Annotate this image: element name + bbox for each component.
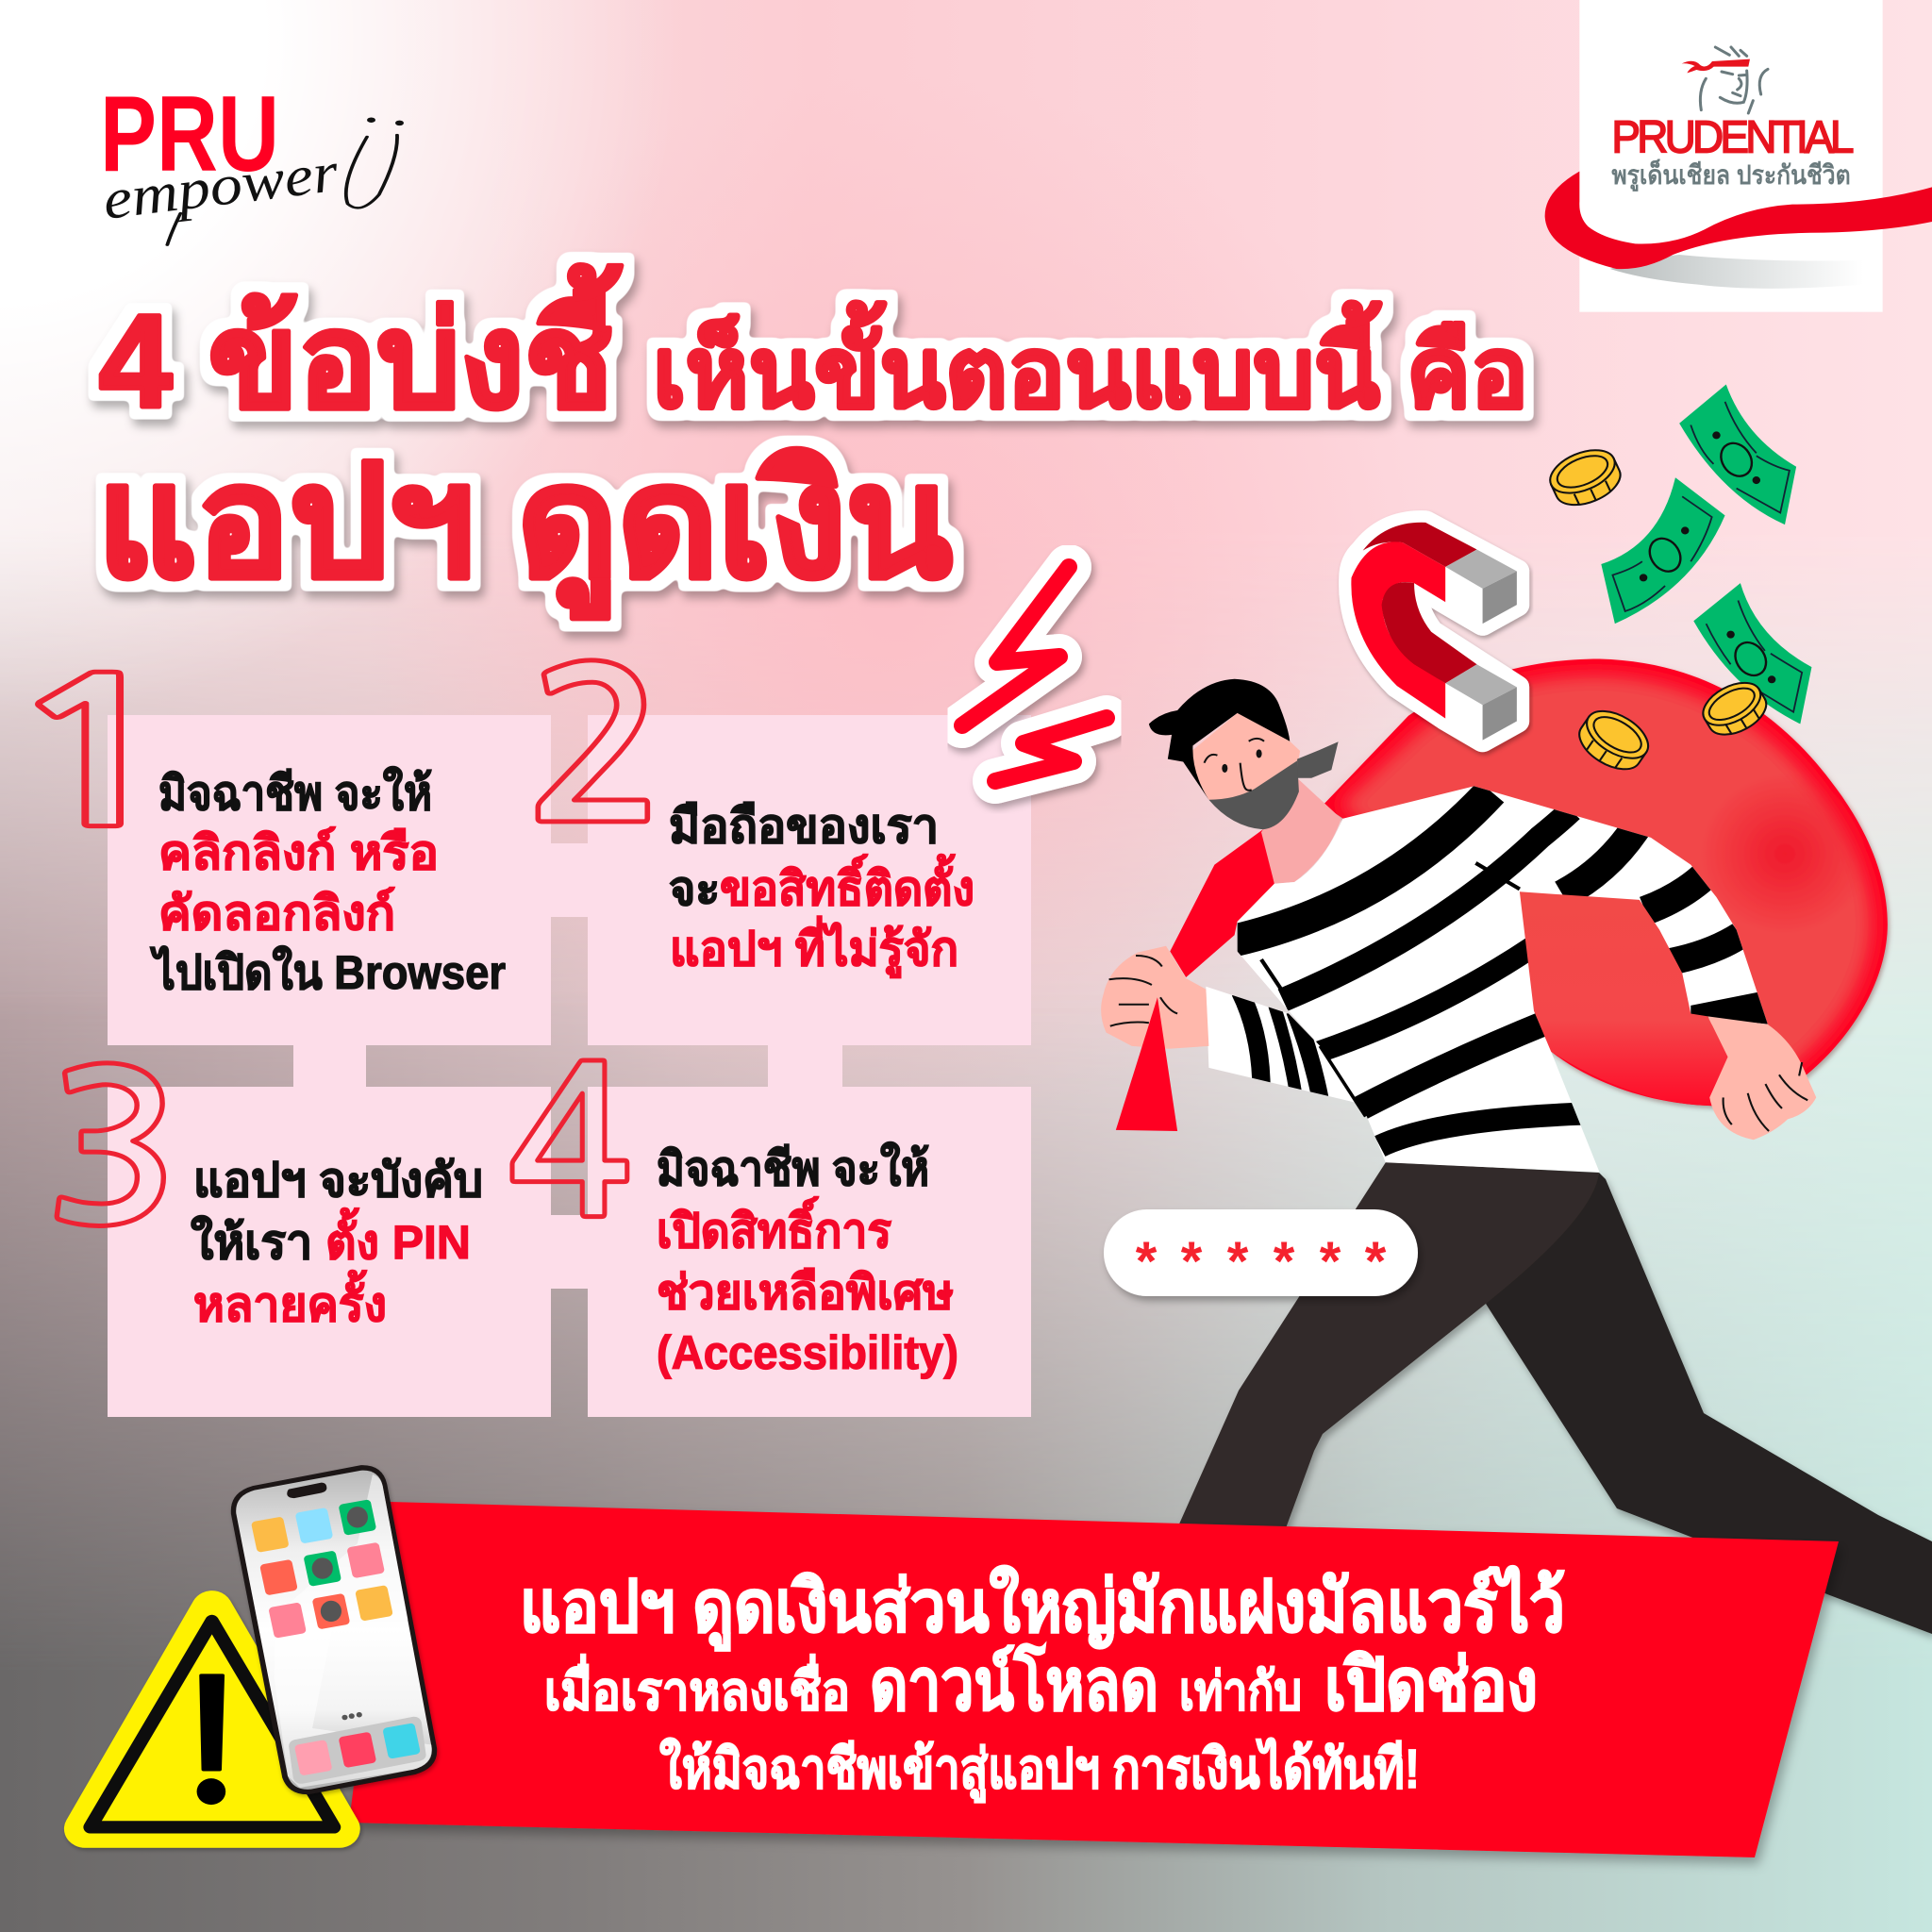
- logo crest: Prudence head: [1682, 47, 1768, 113]
- icon: banknote 2: [1601, 477, 1725, 624]
- illustration: thief upper body, bag and magnet: [1101, 384, 1888, 1173]
- icon: coin 1: [1543, 441, 1627, 513]
- number 4: 4: [507, 1044, 633, 1247]
- password asterisks: *: [1136, 1231, 1158, 1292]
- banner text line 1: แอปฯ ดูดเงินส่วนใหญ่มักแฝงมัลแวร์ไว้: [520, 1565, 1565, 1651]
- title line 2: แอปฯ ดูดเงิน: [97, 436, 952, 619]
- logo: Prudential card: PRUDENTIAL: [1611, 112, 1853, 163]
- app icons: [251, 1499, 393, 1639]
- left sleeve: [1206, 987, 1366, 1117]
- icon: smartphone: [231, 1465, 437, 1794]
- password asterisks: *: [1320, 1231, 1341, 1292]
- panel 2 text: [669, 800, 974, 978]
- icon: banknote 1: [1679, 384, 1796, 525]
- panel 2 text: มือถือของเรา: [669, 800, 939, 853]
- right hand: [1707, 1016, 1816, 1140]
- password pill: [1104, 1209, 1418, 1296]
- panels background: [108, 715, 1031, 1417]
- panel 4 text: ช่วยเหลือพิเศษ: [657, 1266, 954, 1319]
- banner text line 3: ให้มิจฉาชีพเข้าสู่แอปฯ การเงินได้ทันที!: [659, 1737, 1420, 1803]
- panel 1 text: คลิกลิงก์ หรือ: [158, 826, 439, 879]
- title line 1: large part: 4 ข้อบ่งชี้: [99, 264, 623, 435]
- icon: banknote 3: [1693, 583, 1811, 724]
- banner text line 2: [544, 1642, 1538, 1725]
- logo: Prudential card: [1545, 0, 1932, 312]
- password asterisks: *: [1227, 1231, 1249, 1292]
- app dock: [289, 1717, 426, 1784]
- icon: lightning bolts: [962, 567, 1107, 781]
- panel 1 text: คัดลอกลิงก์: [158, 887, 395, 940]
- icon: warning triangle: [85, 1609, 340, 1829]
- title: [97, 264, 1528, 619]
- panel 4 text: [657, 1141, 958, 1379]
- panel 3 text: [191, 1154, 483, 1331]
- banner text line 2: เท่ากับ: [1179, 1661, 1302, 1721]
- logo: PRU empower U: empower: [100, 141, 341, 231]
- bag flap: [1520, 891, 1728, 1106]
- password asterisks: *: [1365, 1231, 1387, 1292]
- number 1: 1: [0, 656, 193, 857]
- password asterisks: *: [1274, 1231, 1295, 1292]
- password asterisks: [1136, 1231, 1387, 1292]
- panel 1 text: [149, 766, 506, 999]
- illustration: thief pants: [1177, 1162, 1932, 1634]
- panel 4 text: (Accessibility): [657, 1326, 958, 1379]
- panel 1 text: ไปเปิดใน Browser: [149, 945, 506, 999]
- icon: coin 3: [1695, 675, 1774, 743]
- icon: coin 2: [1571, 702, 1657, 778]
- banner text line 2: เปิดช่อง: [1324, 1645, 1538, 1725]
- title line 1: smaller part: เห็นขั้นตอนแบบนี้ คือ: [653, 301, 1528, 428]
- banner text line 2: ดาวน์โหลด: [870, 1642, 1158, 1725]
- panel 2 text: จะขอสิทธิ์ติดตั้ง: [669, 853, 974, 915]
- logo: Prudential card: พรูเด็นเชียล ประกันชีวิต: [1611, 158, 1851, 192]
- banner text line 2: เมื่อเราหลงเชื่อ: [544, 1654, 850, 1721]
- money bag: [1323, 658, 1888, 1107]
- panel 4 text: เปิดสิทธิ์การ: [657, 1195, 891, 1257]
- number 3: 3: [43, 1048, 182, 1256]
- logo: PRU empower U: [100, 75, 402, 245]
- left strap: [1170, 829, 1274, 977]
- logo: PRU empower U: PRU: [100, 75, 279, 194]
- panel 3 text: แอปฯ จะบังคับ: [193, 1154, 483, 1207]
- password asterisks: *: [1181, 1231, 1203, 1292]
- head: [1149, 679, 1339, 829]
- panel 3 text: หลายครั้ง: [193, 1270, 387, 1331]
- panel 4 text: มิจฉาชีพ จะให้: [657, 1141, 929, 1195]
- red banner: [349, 1502, 1839, 1857]
- left hand: [1101, 946, 1208, 1049]
- panel 1 text: มิจฉาชีพ จะให้: [158, 766, 432, 820]
- striped shirt: [1235, 786, 1771, 1173]
- red cloth: [1116, 997, 1177, 1131]
- number 2: 2: [525, 645, 669, 853]
- panel 2 text: แอปฯ ที่ไม่รู้จัก: [670, 916, 958, 978]
- panel 3 text: ให้เรา ตั้ง PIN: [191, 1208, 471, 1269]
- icon: horseshoe magnet: [1351, 523, 1517, 741]
- neck: [1261, 778, 1341, 884]
